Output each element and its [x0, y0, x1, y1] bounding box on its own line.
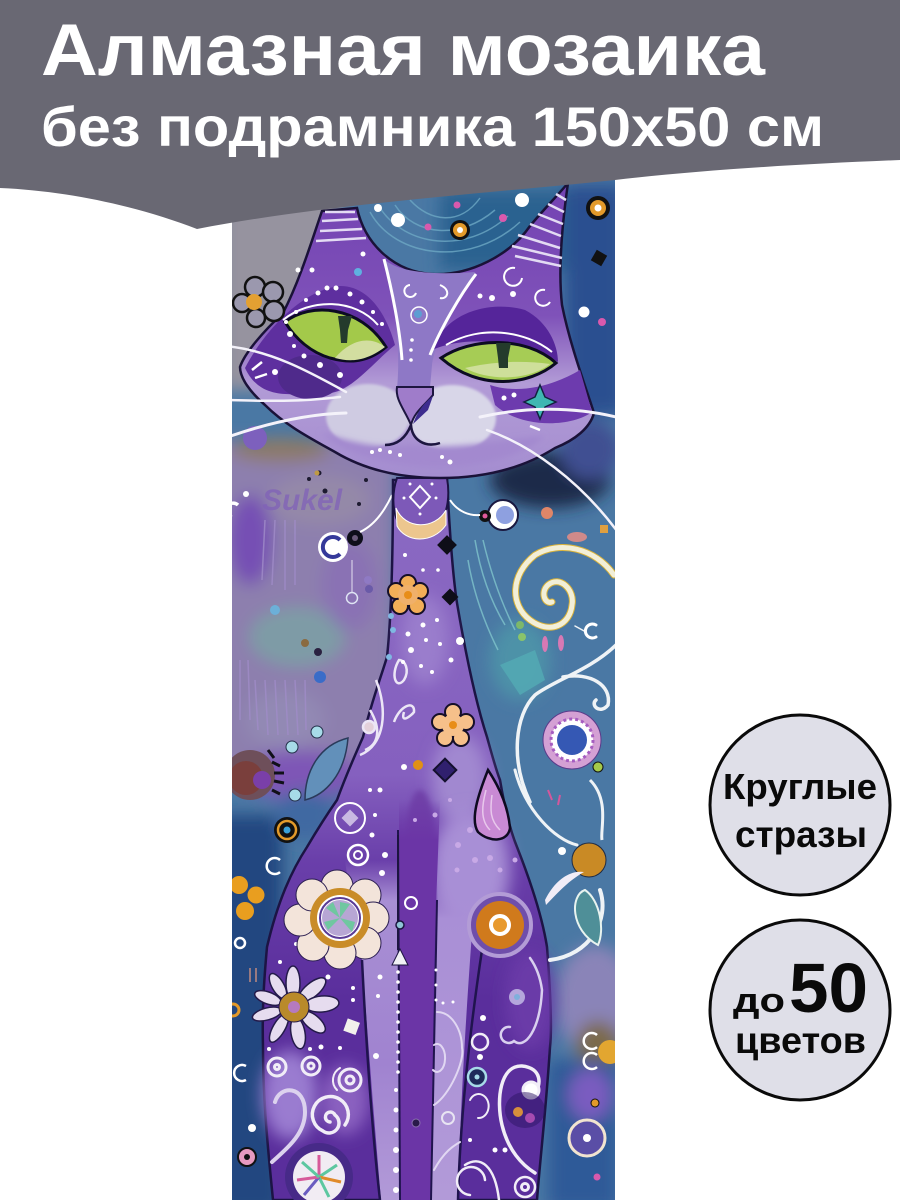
dark centre band [399, 800, 440, 1200]
light right leg [432, 894, 472, 1200]
light left leg [345, 860, 400, 1200]
left eye [283, 304, 386, 361]
icon: black outlined flower top left [233, 277, 284, 327]
icon: paisley [475, 770, 510, 839]
icon: blue eye [450, 500, 608, 542]
icon: teal leaf [305, 738, 348, 800]
left eye patch [245, 286, 395, 394]
badge: up to 50 colours [710, 920, 890, 1100]
bottom-right ring [569, 1120, 605, 1156]
whiskers [225, 346, 620, 535]
chest diamond [434, 759, 456, 781]
right eye lid [432, 307, 558, 362]
banner shape [0, 0, 900, 229]
icon: orange flower lower [432, 704, 474, 746]
icon: white swirl eye [318, 530, 363, 562]
flower 2 daisy [251, 966, 340, 1050]
icon: blue eye medallion [543, 711, 601, 769]
badge: round rhinestones: стразы [735, 814, 867, 855]
swirls on body [268, 958, 542, 1200]
teal star [524, 385, 556, 419]
forehead triangle [384, 259, 475, 388]
nose [385, 387, 440, 445]
illustration: purple cat painting [215, 180, 635, 1200]
subtitle: без подрамника 150х50 см [41, 95, 824, 158]
face dots [272, 252, 516, 464]
badge: round rhinestones: Круглые [723, 766, 877, 807]
chest details [267, 535, 518, 1193]
badge: up to 50 colours: 50 [789, 949, 868, 1027]
blue dot [354, 268, 362, 276]
spiral: large [515, 548, 616, 960]
flower 1 cream [284, 870, 389, 969]
left haunch highlight [262, 1050, 318, 1140]
medallion ring left [335, 803, 368, 887]
muzzle [326, 384, 410, 448]
teal ring and lilac disc [468, 989, 545, 1152]
ear stripes [316, 194, 566, 266]
neck collar [393, 478, 448, 539]
left field marks [225, 426, 392, 801]
left field marks: Sukel [262, 484, 343, 517]
forehead lines [384, 259, 550, 360]
lower-body paisley swirl [360, 660, 414, 755]
badge: round rhinestones [710, 715, 890, 895]
title: Алмазная мозаика [41, 10, 767, 91]
teal hatch [500, 650, 545, 695]
icon: orange flower upper [388, 575, 428, 614]
icon: orange sun [572, 843, 606, 877]
cat head [240, 183, 594, 478]
black diamonds [437, 535, 458, 605]
badge: up to 50 colours: до [733, 982, 785, 1020]
cat body [262, 480, 555, 1200]
top blue area details [370, 193, 610, 326]
header banner [0, 0, 900, 229]
orange cluster [584, 1033, 622, 1069]
right field ornaments [450, 500, 622, 1180]
background washes [215, 180, 635, 1200]
flower 4 dial bottom [285, 1143, 353, 1200]
right eye [441, 332, 556, 382]
icon: brown seed flower [225, 750, 284, 800]
left field lower ornaments [227, 817, 300, 1166]
badge: up to 50 colours: цветов [735, 1020, 866, 1061]
head shape [240, 183, 594, 478]
icon: white diamond [343, 1018, 360, 1035]
flower 3 orange medallion [469, 894, 531, 956]
